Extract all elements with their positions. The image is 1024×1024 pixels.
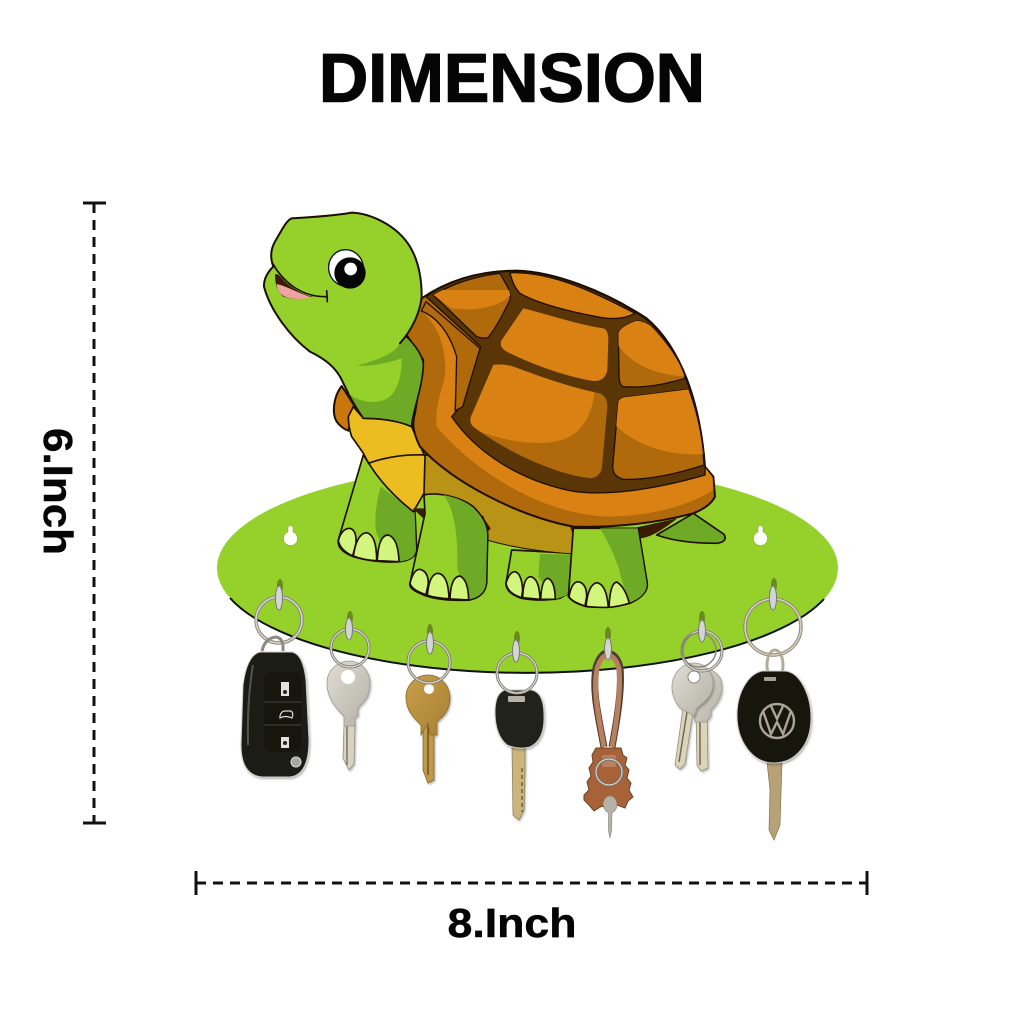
width label: 8.Inch bbox=[448, 900, 576, 946]
car key blade bbox=[512, 748, 525, 820]
VW key fob bbox=[737, 671, 811, 763]
hook 7 bbox=[770, 578, 777, 610]
shell dark carapace bbox=[426, 271, 705, 493]
hook 5 with leather strap bbox=[584, 627, 633, 838]
turtle neck bbox=[348, 337, 423, 427]
hook 4 with black car key bbox=[495, 631, 544, 820]
height label: 6.Inch bbox=[35, 428, 81, 555]
scute center upper bbox=[501, 308, 608, 381]
keyhole right bbox=[754, 526, 768, 546]
shell side scute bbox=[421, 302, 480, 411]
scute right upper bbox=[617, 317, 687, 387]
tag loop bbox=[602, 755, 616, 767]
scute top bbox=[510, 273, 635, 319]
small ring on tag bbox=[596, 759, 622, 785]
turtle head bbox=[264, 213, 422, 402]
hook 6 with two keys bbox=[672, 611, 722, 771]
silver key bbox=[327, 661, 370, 770]
turtle back near leg bbox=[568, 528, 647, 607]
VW key blade bbox=[767, 762, 782, 840]
title: DIMENSION bbox=[319, 40, 705, 116]
small fob ring bbox=[262, 637, 283, 651]
small ring 7 bbox=[767, 650, 783, 680]
turtle orange collar bbox=[334, 386, 355, 431]
hook 2 bbox=[346, 611, 353, 640]
turtle belly bbox=[408, 447, 574, 554]
brass key bbox=[406, 675, 450, 783]
ring 7 bbox=[745, 599, 801, 655]
hook 3 bbox=[426, 624, 434, 654]
turtle tail bbox=[657, 513, 725, 543]
hook 6 bbox=[698, 611, 706, 642]
board: green oval bbox=[217, 463, 838, 673]
small key bbox=[603, 796, 617, 838]
hook 1 bbox=[276, 579, 283, 610]
ring 1 bbox=[256, 597, 302, 643]
turtle front near leg bbox=[410, 494, 488, 600]
shell outer base bbox=[407, 271, 715, 527]
VW logo bbox=[760, 704, 794, 738]
ring 6 bbox=[682, 631, 722, 671]
shadows under shell bbox=[413, 508, 677, 538]
turtle yellow chest bbox=[348, 407, 427, 512]
turtle back far leg bbox=[506, 550, 574, 600]
turtle illustration bbox=[264, 213, 725, 607]
hook 7 with VW key bbox=[737, 578, 811, 840]
front key bbox=[672, 663, 713, 769]
ring 3 bbox=[408, 641, 450, 683]
horizontal dimension line bbox=[196, 871, 867, 895]
hook 2 with silver key bbox=[327, 611, 370, 770]
turtle eye bbox=[325, 246, 367, 290]
hook 5 bbox=[604, 627, 612, 660]
vertical dimension line bbox=[83, 203, 106, 823]
back key bbox=[690, 668, 722, 771]
scute top left bbox=[427, 273, 513, 338]
scute right lower bbox=[613, 383, 707, 479]
leather tag bbox=[584, 748, 633, 811]
leather strap bbox=[595, 653, 620, 747]
turtle mouth bbox=[273, 263, 327, 302]
shell rim light band bbox=[422, 312, 713, 517]
car key fob bbox=[241, 652, 309, 777]
keyhole left bbox=[283, 526, 298, 546]
hook 1 with car remote bbox=[241, 579, 309, 777]
turtle shell bbox=[407, 271, 715, 527]
hook 4 bbox=[512, 631, 520, 662]
scute center lower bbox=[467, 360, 607, 478]
turtle front far leg bbox=[338, 455, 417, 562]
ring 2 bbox=[331, 629, 369, 667]
hook 3 with brass key bbox=[406, 624, 450, 783]
ring 4 bbox=[497, 653, 537, 693]
car key head bbox=[495, 690, 544, 748]
